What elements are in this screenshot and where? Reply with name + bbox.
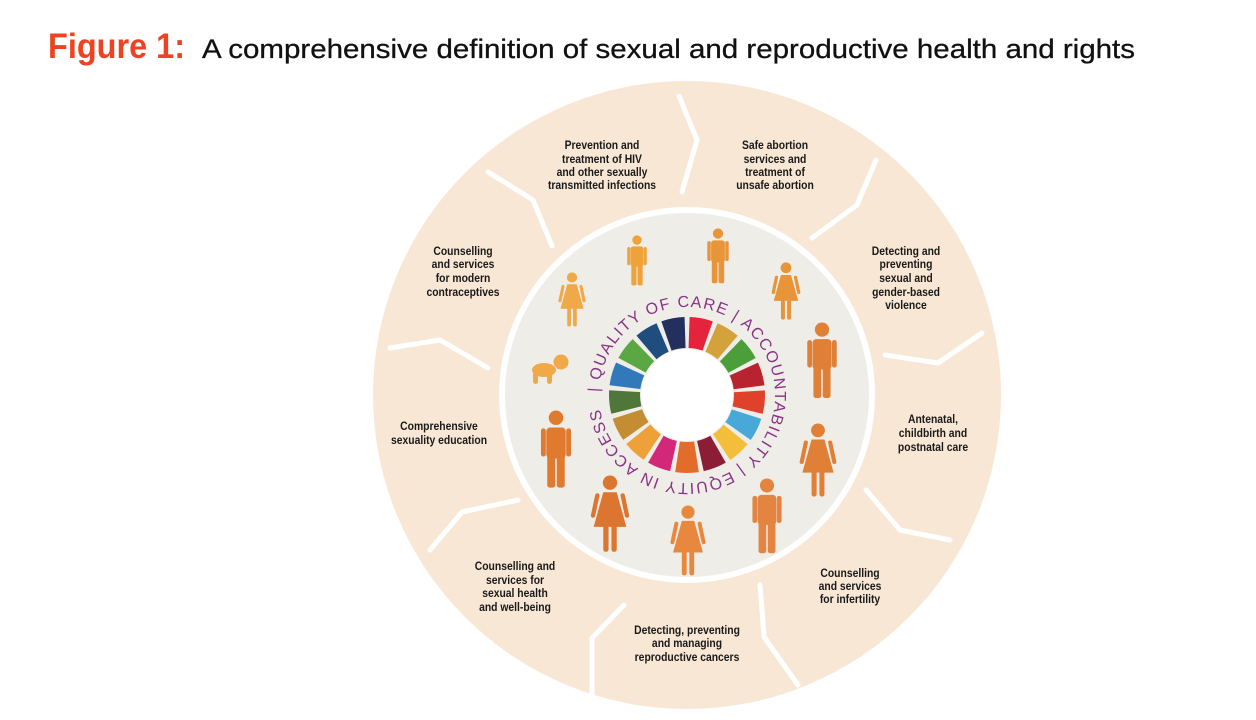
label: infertility: Counselling <box>820 568 880 580</box>
label: HIV: transmitted infections <box>548 180 656 192</box>
label: cancers: and managing <box>652 638 722 650</box>
label: contraceptives: and services <box>432 259 494 271</box>
label: violence: sexual and <box>879 273 933 285</box>
wheel center <box>641 349 733 441</box>
label: cancers: Detecting, preventing <box>634 625 740 637</box>
label: abortion: treatment of <box>745 167 805 179</box>
label: sexual health: services for <box>486 575 545 587</box>
label: antenatal: childbirth and <box>899 428 967 440</box>
label: sexuality education <box>391 421 487 447</box>
label: antenatal <box>898 414 968 454</box>
label: HIV <box>548 140 656 192</box>
title: A comprehensive definition of sexual and reproductive health and rights <box>202 34 1135 64</box>
icon: crawling baby <box>532 354 568 384</box>
label: abortion: services and <box>744 154 806 166</box>
label: sexual health: Counselling and <box>475 561 555 573</box>
label: antenatal: postnatal care <box>898 442 968 454</box>
label: infertility: for infertility <box>820 594 881 606</box>
label: violence: Detecting and <box>872 246 940 258</box>
label: violence <box>872 246 940 312</box>
label: HIV: Prevention and <box>565 140 639 152</box>
label: sexuality education: sexuality education <box>391 435 487 447</box>
title: Figure 1: <box>48 27 185 66</box>
label: cancers <box>634 625 740 664</box>
label: violence: preventing <box>880 259 932 271</box>
inner circle <box>502 210 872 580</box>
SDG wheel <box>599 307 775 483</box>
label: cancers: reproductive cancers <box>635 652 739 664</box>
label: sexual health: sexual health <box>482 588 548 600</box>
label: violence: violence <box>885 300 927 312</box>
ring text: | QUALITY OF CARE | ACCOUNTABILITY | EQUITY IN ACCESS <box>588 296 786 494</box>
label: sexuality education: Comprehensive <box>400 421 478 433</box>
label: HIV: treatment of HIV <box>562 154 643 166</box>
label: contraceptives: Counselling <box>433 246 493 258</box>
label: contraceptives: for modern <box>436 273 490 285</box>
title <box>48 27 1135 66</box>
label: antenatal: Antenatal, <box>908 414 958 426</box>
label: abortion: unsafe abortion <box>736 180 814 192</box>
outer ring <box>373 81 1001 709</box>
label: contraceptives: contraceptives <box>426 287 500 299</box>
people icons <box>541 228 837 575</box>
label: HIV: and other sexually <box>557 167 648 179</box>
label: sexual health <box>475 561 555 614</box>
label: infertility: and services <box>819 581 881 593</box>
label: abortion <box>736 140 814 192</box>
label: violence: gender-based <box>872 287 940 299</box>
labels <box>391 140 968 664</box>
label: abortion: Safe abortion <box>742 140 808 152</box>
label: contraceptives <box>426 246 500 299</box>
label: sexual health: and well-being <box>479 602 551 614</box>
label: infertility <box>819 568 881 606</box>
